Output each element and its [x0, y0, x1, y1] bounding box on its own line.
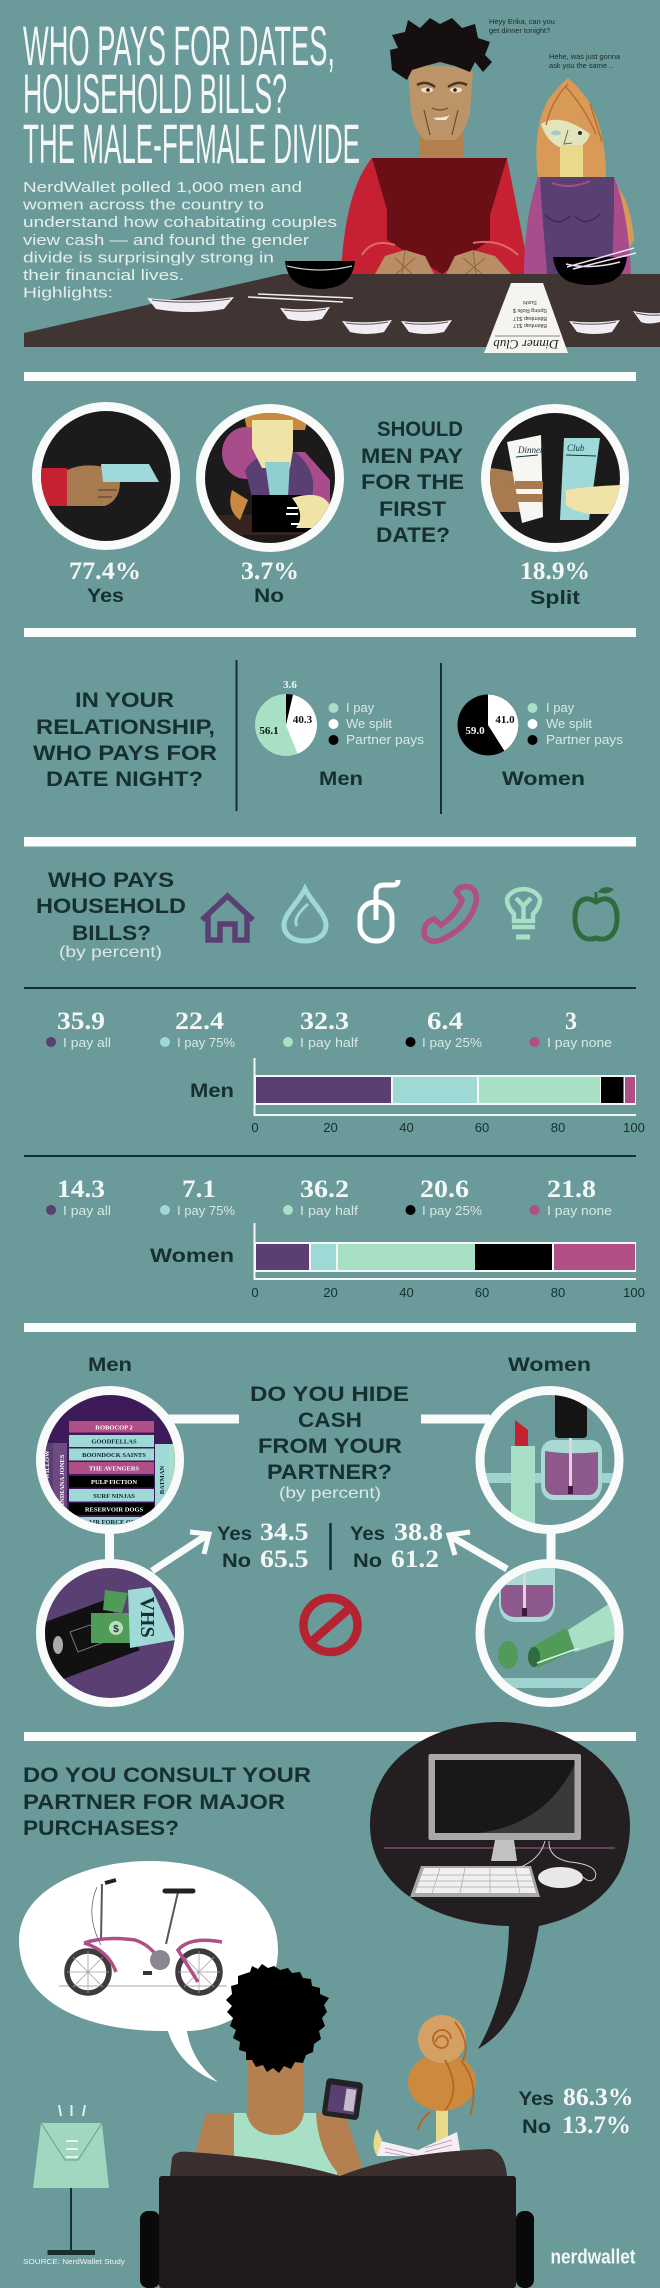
illustration: man at table	[341, 18, 530, 274]
pie chart: women: 59.0	[465, 725, 485, 737]
men values and legend: I pay all	[63, 1035, 111, 1050]
men stacked bar chart: 80	[551, 1120, 565, 1135]
intro paragraph: NerdWallet polled 1,000 men and	[23, 179, 302, 196]
computer monitor	[384, 1754, 615, 1861]
circle: no, wallet	[196, 404, 344, 552]
sofa	[140, 2149, 534, 2288]
results: men: 34.5	[260, 1519, 308, 1546]
pie chart: women: 41.0	[495, 714, 515, 726]
heading: FOR THE	[361, 470, 464, 494]
circle: VHS tape with cash: $	[113, 1624, 119, 1635]
heading: (by percent)	[59, 944, 162, 961]
men values and legend: I pay 75%	[177, 1035, 235, 1050]
icon: prohibition sign	[304, 1598, 358, 1652]
intro paragraph: Highlights:	[23, 284, 113, 302]
men stacked bar chart: 40	[399, 1120, 414, 1135]
stat: no: 3.7%	[241, 558, 299, 585]
heading: RELATIONSHIP,	[36, 715, 215, 739]
icon: computer mouse	[360, 880, 398, 941]
men stacked bar chart: Men	[190, 1081, 234, 1102]
stat: split: 18.9%	[520, 558, 590, 585]
pie chart: men: 56.1	[259, 725, 279, 737]
lamp	[33, 2105, 109, 2255]
heading: (by percent)	[279, 1485, 381, 1502]
women stacked bar chart: 80	[551, 1285, 565, 1300]
circle: movie shelf: INDIANA JONES	[59, 1454, 66, 1505]
legend: men	[328, 700, 425, 747]
results: men: No	[222, 1551, 251, 1572]
intro paragraph: women across the country to	[22, 196, 264, 214]
circle: hollowed lipstick	[476, 1559, 624, 1707]
circle: split, two bills	[481, 404, 629, 552]
menu card: Bibimbap $17	[513, 315, 547, 321]
heading	[250, 1382, 409, 1502]
men stacked bar chart: 20	[323, 1120, 338, 1135]
women stacked bar chart	[150, 1223, 645, 1300]
circle: movie shelf: AIR FORCE ONE	[88, 1519, 140, 1526]
woman from behind	[374, 2015, 476, 2158]
speech text: woman	[549, 52, 621, 70]
heading: DO YOU CONSULT YOUR	[23, 1763, 312, 1787]
heading: CASH	[298, 1408, 362, 1432]
circle: movie shelf: GOODFELLAS	[91, 1438, 137, 1446]
label: women: Women	[508, 1355, 591, 1376]
heading	[23, 1763, 312, 1840]
men stacked bar chart: 60	[475, 1120, 489, 1135]
panel: do you hide cash	[36, 1355, 624, 1707]
menu card: Spring Rolls $	[513, 307, 547, 313]
results: women	[350, 1519, 443, 1573]
icon: water drop	[284, 889, 326, 941]
result stats: 86.3%	[563, 2084, 634, 2111]
women values and legend: I pay half	[300, 1203, 358, 1218]
circle: movie shelf: BATMAN	[159, 1465, 166, 1494]
speech text: man: Heyy Erika, can you	[489, 17, 555, 26]
results: women: Yes	[350, 1524, 385, 1545]
men values and legend: 6.4	[427, 1008, 464, 1035]
heading	[36, 868, 186, 961]
men stacked bar chart	[190, 1058, 645, 1135]
legend: women: I pay	[546, 700, 575, 715]
circle: movie shelf: BOONDOCK SAINTS	[82, 1452, 146, 1459]
icon: telephone	[424, 887, 476, 941]
men values and legend: 22.4	[175, 1008, 225, 1035]
intro paragraph: their financial lives.	[23, 267, 184, 284]
circle: movie shelf: ROBOCOP 2	[95, 1424, 133, 1432]
heading: BILLS?	[72, 921, 151, 945]
circle: split, two bills: Club	[567, 443, 585, 453]
circle: VHS tape with cash: VHS	[136, 1596, 158, 1638]
heading: PURCHASES?	[23, 1816, 179, 1840]
result stats: 13.7%	[562, 2112, 631, 2139]
arrow: women	[449, 1532, 507, 1569]
speech text: man: get dinner tonight?	[489, 26, 550, 35]
heading: WHO PAYS	[48, 868, 174, 892]
circle: movie shelf: WILLOW	[44, 1450, 51, 1480]
women values and legend: 36.2	[300, 1176, 349, 1203]
result stats: Yes	[518, 2089, 554, 2110]
stat: no: No	[254, 586, 284, 607]
heading: WHO PAYS FOR	[33, 741, 218, 765]
women values and legend: 21.8	[547, 1176, 596, 1203]
plates	[147, 297, 660, 334]
legend: women: Partner pays	[546, 732, 624, 747]
men stacked bar chart: 0	[251, 1120, 259, 1135]
heading	[33, 688, 218, 791]
men values and legend: I pay none	[547, 1035, 612, 1050]
women stacked bar chart: 100	[623, 1285, 645, 1300]
legend: women: We split	[546, 716, 592, 731]
stat: yes: Yes	[87, 586, 124, 607]
women values and legend: 20.6	[420, 1176, 469, 1203]
results: men	[217, 1519, 308, 1573]
result stats	[518, 2084, 634, 2139]
circle: movie shelf: PULP FICTION	[91, 1479, 137, 1486]
man from behind	[189, 1964, 365, 2178]
open book	[374, 2129, 461, 2158]
pie chart: men: 40.3	[293, 714, 313, 726]
stat: split: Split	[530, 588, 581, 609]
men values and legend: 3	[565, 1008, 577, 1035]
black bowl and chopsticks right	[553, 248, 636, 285]
title: WHO PAYS FOR DATES,	[23, 14, 335, 77]
heading: MEN PAY	[361, 444, 463, 468]
white speech bubble: bicycle	[19, 1861, 278, 2082]
bicycle	[59, 1880, 227, 1993]
women values and legend: 7.1	[182, 1176, 216, 1203]
results: men: Yes	[217, 1524, 252, 1545]
keyboard	[410, 1866, 540, 1897]
heading: IN YOUR	[75, 688, 175, 712]
heading: PARTNER FOR MAJOR	[23, 1790, 286, 1814]
women values and legend: I pay 75%	[177, 1203, 235, 1218]
legend: men: I pay	[346, 700, 375, 715]
women stacked bar chart: 40	[399, 1285, 414, 1300]
menu card: Sushi	[523, 299, 537, 305]
heading: DO YOU HIDE	[250, 1382, 409, 1406]
speech text: woman: ask you the same ..	[549, 61, 613, 70]
title	[23, 14, 360, 175]
results: women: 38.8	[394, 1519, 443, 1546]
heading	[361, 417, 464, 547]
results: men: 65.5	[260, 1546, 308, 1573]
panel: major purchases	[19, 1722, 636, 2288]
women stacked bar chart: 60	[475, 1285, 489, 1300]
men values and legend: I pay 25%	[422, 1035, 482, 1050]
mouse	[518, 1841, 596, 1888]
arrow: men	[152, 1532, 209, 1571]
intro paragraph: view cash — and found the gender	[23, 232, 309, 249]
heading: HOUSEHOLD	[36, 894, 186, 918]
legend: women	[528, 700, 624, 747]
label: men: Men	[319, 769, 363, 790]
label: women: Women	[502, 769, 585, 790]
black bowl left	[285, 261, 355, 289]
title: HOUSEHOLD BILLS?	[23, 62, 287, 125]
results: women: 61.2	[391, 1546, 439, 1573]
panel: should men pay for the first date	[32, 402, 629, 609]
icon: light bulb	[507, 889, 540, 937]
circle: split, two bills: Dinner	[517, 445, 544, 455]
legend: men: Partner pays	[346, 732, 425, 747]
pie chart: men	[255, 679, 317, 756]
circle: VHS tape with cash	[36, 1559, 184, 1707]
result stats: No	[522, 2117, 551, 2138]
women values and legend: I pay none	[547, 1203, 612, 1218]
menu card: Dinner Club	[493, 337, 560, 352]
intro paragraph	[22, 179, 337, 302]
speech text: woman: Hehe, was just gonna	[549, 52, 621, 61]
men values and legend: I pay half	[300, 1035, 358, 1050]
menu card	[484, 283, 568, 353]
heading: FROM YOUR	[258, 1434, 403, 1458]
men values and legend: 32.3	[300, 1008, 349, 1035]
header panel	[22, 14, 660, 353]
stat: yes: 77.4%	[69, 558, 141, 585]
intro paragraph: understand how cohabitating couples	[23, 214, 337, 231]
menu card: Bibimbap $17	[513, 322, 547, 328]
women values and legend: I pay all	[63, 1203, 111, 1218]
circle: cosmetics shelf	[476, 1386, 624, 1536]
circle: movie shelf	[36, 1386, 184, 1537]
heading: DATE NIGHT?	[46, 767, 203, 791]
pie chart: men: 3.6	[283, 679, 297, 691]
stat: yes	[69, 558, 141, 607]
smartphone	[322, 2078, 363, 2120]
stat: split	[520, 558, 590, 609]
women values and legend: 14.3	[57, 1176, 105, 1203]
icon: house	[202, 896, 253, 940]
women stacked bar chart: 0	[251, 1285, 259, 1300]
men stacked bar chart: 100	[623, 1120, 645, 1135]
women stacked bar chart: 20	[323, 1285, 338, 1300]
pie chart: women	[458, 694, 518, 756]
icon: apple	[575, 887, 617, 939]
women values and legend: I pay 25%	[422, 1203, 482, 1218]
men values and legend	[46, 1008, 612, 1050]
legend: men: We split	[346, 716, 392, 731]
dark thought bubble: computer	[370, 1722, 630, 2049]
source note: SOURCE: NerdWallet Study	[23, 2257, 125, 2266]
heading: SHOULD	[377, 417, 463, 441]
heading: PARTNER?	[267, 1460, 392, 1484]
circle: movie shelf: RESERVOIR DOGS	[85, 1506, 144, 1514]
circle: movie shelf: SURF NINJAS	[93, 1493, 135, 1500]
stat: no	[241, 558, 299, 607]
circle: movie shelf: THE AVENGERS	[89, 1466, 140, 1472]
logo: nerdwallet: nerdwallet	[550, 2246, 636, 2268]
illustration: woman at table	[524, 78, 634, 274]
men values and legend: 35.9	[57, 1008, 105, 1035]
results: women: No	[353, 1551, 382, 1572]
intro paragraph: divide is surprisingly strong in	[23, 250, 274, 266]
women values and legend	[46, 1176, 612, 1218]
speech text: man	[489, 17, 555, 35]
circle: yes, credit card	[32, 402, 180, 550]
panel: who pays for date night	[33, 660, 624, 814]
label: men: Men	[88, 1355, 132, 1376]
women stacked bar chart: Women	[150, 1246, 234, 1267]
chopsticks	[248, 294, 353, 302]
panel: who pays household bills	[24, 868, 645, 1300]
table	[24, 274, 660, 347]
heading: FIRST	[379, 497, 446, 521]
heading: DATE?	[376, 523, 450, 547]
